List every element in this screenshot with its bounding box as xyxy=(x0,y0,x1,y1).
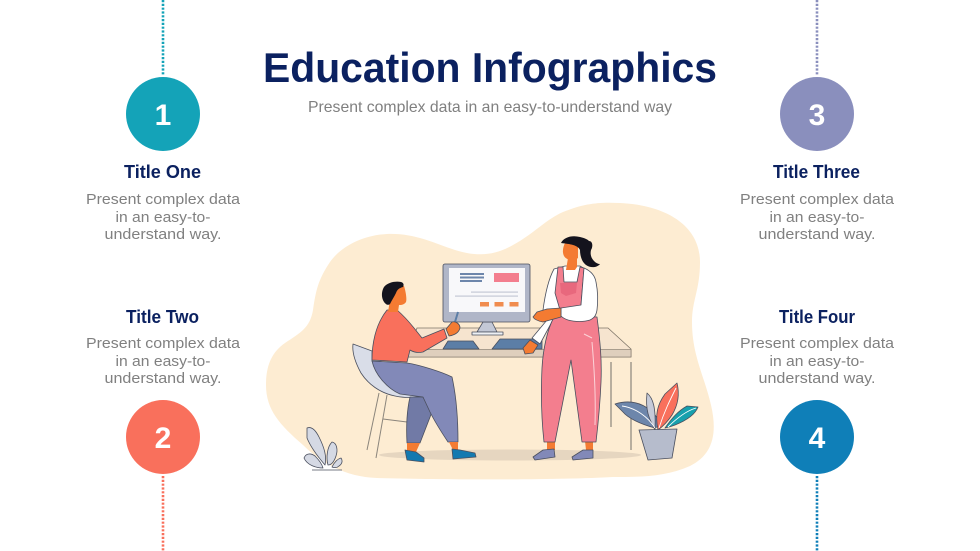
blue leaf xyxy=(615,402,659,428)
panel: item three xyxy=(740,0,895,243)
title: Education Infographics xyxy=(263,44,717,91)
floor shadow xyxy=(379,450,641,460)
connector line four xyxy=(816,476,818,551)
text block four: Present complex data xyxy=(740,335,895,352)
standing woman xyxy=(523,236,601,460)
small plant xyxy=(304,428,342,470)
grey leaf xyxy=(647,393,655,430)
panel: item two xyxy=(86,307,241,551)
text block two: in an easy-to- xyxy=(116,353,210,370)
computer monitor xyxy=(443,264,530,335)
text block one: understand way. xyxy=(104,226,222,243)
chair xyxy=(353,344,422,458)
connector line three xyxy=(816,0,818,75)
neck and face xyxy=(388,286,406,312)
ankles xyxy=(547,441,593,450)
potted plant xyxy=(615,383,698,460)
face xyxy=(563,243,578,260)
text block four xyxy=(740,335,895,387)
heading: title three: Title Three xyxy=(773,162,860,182)
number badge three xyxy=(780,77,854,151)
heading: title one: Title One xyxy=(124,162,201,182)
hand xyxy=(446,322,460,336)
number badge four xyxy=(780,400,854,474)
text block four: in an easy-to- xyxy=(770,353,864,370)
background blob xyxy=(266,203,714,479)
right tablet xyxy=(492,339,542,349)
front leg xyxy=(372,361,458,442)
panel: item one xyxy=(86,0,241,243)
text block two: understand way. xyxy=(104,370,222,387)
connector line one xyxy=(162,0,164,75)
text block one: in an easy-to- xyxy=(116,209,210,226)
text block one: Present complex data xyxy=(86,191,241,208)
number badge three: 3 xyxy=(809,99,825,132)
white shirt body and left arm xyxy=(543,266,596,318)
text block one xyxy=(86,191,241,243)
desk xyxy=(408,328,631,450)
trouser highlight xyxy=(584,334,595,425)
number badge two xyxy=(126,400,200,474)
shoes xyxy=(533,449,593,460)
red leaf xyxy=(657,383,678,430)
pen xyxy=(455,312,458,322)
panel: item four xyxy=(740,307,895,551)
text block two: Present complex data xyxy=(86,335,241,352)
ankles xyxy=(407,442,458,452)
hair xyxy=(561,236,600,267)
sweater xyxy=(372,310,447,362)
pot xyxy=(639,429,677,460)
illustration: people at a desk xyxy=(266,203,714,479)
teal leaf xyxy=(665,406,698,428)
lower hand xyxy=(523,340,538,354)
right sleeve xyxy=(561,268,598,322)
text block two xyxy=(86,335,241,387)
connector line two xyxy=(162,476,164,551)
left tablet xyxy=(443,341,479,349)
heading: title two: Title Two xyxy=(126,307,199,327)
leaf veins xyxy=(622,388,696,428)
subtitle: Present complex data in an easy-to-understand way xyxy=(308,99,672,116)
shoes xyxy=(405,449,476,462)
text block three xyxy=(740,191,895,243)
text block three: in an easy-to- xyxy=(770,209,864,226)
number badge two: 2 xyxy=(155,422,171,455)
hair xyxy=(382,282,404,305)
upper hand xyxy=(533,308,561,322)
number badge four: 4 xyxy=(809,422,826,455)
number badge one: 1 xyxy=(155,99,171,132)
bib pocket xyxy=(560,283,577,296)
text block three: Present complex data xyxy=(740,191,895,208)
number badge one xyxy=(126,77,200,151)
heading: title four: Title Four xyxy=(779,307,855,327)
lower sleeve xyxy=(532,318,554,344)
overalls xyxy=(541,267,601,442)
text block four: understand way. xyxy=(758,370,876,387)
seated man xyxy=(353,282,476,462)
back leg xyxy=(407,397,432,443)
text block three: understand way. xyxy=(758,226,876,243)
neck xyxy=(566,258,577,270)
